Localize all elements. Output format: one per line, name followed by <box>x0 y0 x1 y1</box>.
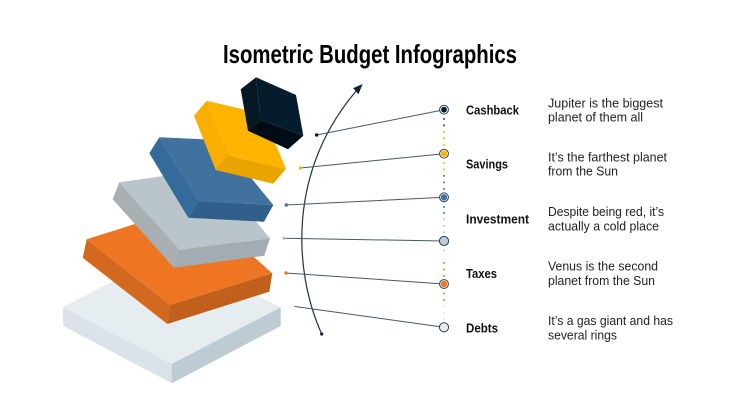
item: investment <box>285 193 664 234</box>
label: savings: Savings <box>466 156 508 172</box>
layer: yellow <box>194 101 286 184</box>
label: taxes: Taxes <box>466 266 497 281</box>
item: debts <box>292 305 673 342</box>
layer: investment gray <box>113 169 270 268</box>
isometric stack <box>63 77 303 383</box>
layer: cashback navy <box>241 77 303 149</box>
layer: savings blue <box>149 137 273 222</box>
curved arrow <box>302 85 362 336</box>
description: debts: It’s a gas giant and has <box>548 314 673 328</box>
description: savings: It’s the farthest planet <box>548 150 668 164</box>
description: taxes: planet from the Sun <box>548 274 655 288</box>
title: Isometric Budget Infographics <box>223 39 517 69</box>
connector: debts <box>292 305 449 332</box>
connector: savings <box>299 149 448 170</box>
layer: taxes orange <box>83 205 272 324</box>
description: debts: several rings <box>548 328 617 342</box>
description: cashback: Jupiter is the biggest <box>548 96 664 110</box>
connector: investment <box>285 193 448 207</box>
item: cashback <box>315 96 664 137</box>
connector: cashback <box>315 105 448 137</box>
description: debts <box>548 314 673 342</box>
dotted timeline <box>443 118 445 320</box>
label: cashback: Cashback <box>466 102 520 118</box>
item: taxes <box>282 236 658 288</box>
description: cashback: planet of them all <box>548 110 643 124</box>
description: investment: actually a cold place <box>548 220 659 234</box>
label: investment: Investment <box>466 212 530 226</box>
connector: taxes gray <box>282 236 449 246</box>
connector: taxes orange <box>284 271 448 288</box>
description: investment <box>548 205 664 234</box>
description: investment: Despite being red, it’s <box>548 205 664 219</box>
description: savings <box>548 150 668 178</box>
description: cashback <box>548 96 664 124</box>
layer: debts base <box>63 251 281 383</box>
label: debts: Debts <box>466 320 498 336</box>
description: taxes <box>548 260 658 288</box>
description: taxes: Venus is the second <box>548 260 658 274</box>
item: savings <box>299 149 668 178</box>
description: savings: from the Sun <box>548 164 618 178</box>
